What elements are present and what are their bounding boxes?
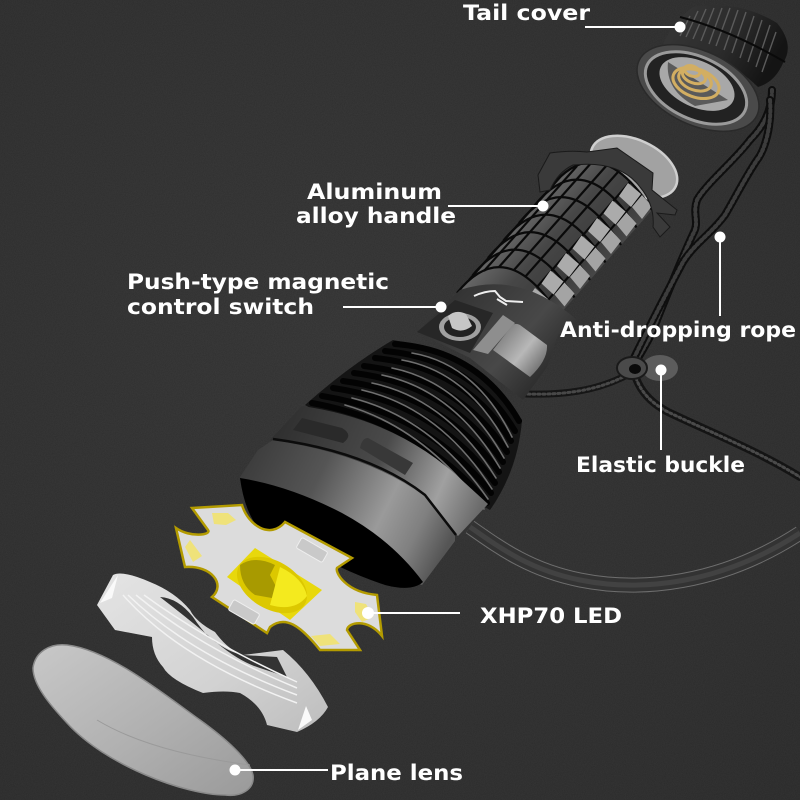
silver thread [581,123,687,211]
label: Elastic buckle: Elastic buckle [576,453,745,477]
board [176,505,382,650]
icon: gold spring [669,62,723,104]
led chip [227,548,322,620]
push switch button [439,312,481,341]
head opening [240,478,423,588]
cooling fins [305,340,522,510]
label: Aluminum alloy handle: alloy handle [296,204,456,228]
label: Tail cover: Tail cover [463,1,591,25]
label: Push-type magnetic control switch [127,270,389,319]
ring opening [160,597,287,677]
XHP70 LED board [176,505,382,650]
leader lines and dots [230,22,726,776]
collar band with slots [270,406,488,536]
label: Aluminum alloy handle [296,180,456,228]
tail cover [623,5,788,149]
label: Plane lens: Plane lens [330,761,463,785]
ring nut [97,574,328,732]
neck [417,284,577,400]
elastic buckle [617,355,678,381]
handle collar [538,148,677,237]
label: Anti-dropping rope: Anti-dropping rope [560,318,796,342]
label: Push-type magnetic control switch: Push-type magnetic [127,270,389,294]
resistors [228,537,328,625]
tail cover front band [623,27,773,149]
label: Aluminum alloy handle: Aluminum [307,180,442,204]
ring threads [123,595,297,703]
aluminum alloy handle grid [457,162,652,324]
silver side panel [473,315,547,377]
logo [474,291,523,305]
anti-dropping rope [526,90,800,477]
flashlight body [240,123,687,588]
head bezel [240,440,455,585]
tail cover ribbed body [663,5,788,87]
USB cord [470,527,800,585]
bezel groove [273,439,456,535]
yellow pads [185,513,373,646]
label: Push-type magnetic control switch: control switch [127,295,314,319]
switch plate [417,300,493,353]
plane lens [33,645,253,795]
label: XHP70 LED: XHP70 LED [480,604,622,628]
